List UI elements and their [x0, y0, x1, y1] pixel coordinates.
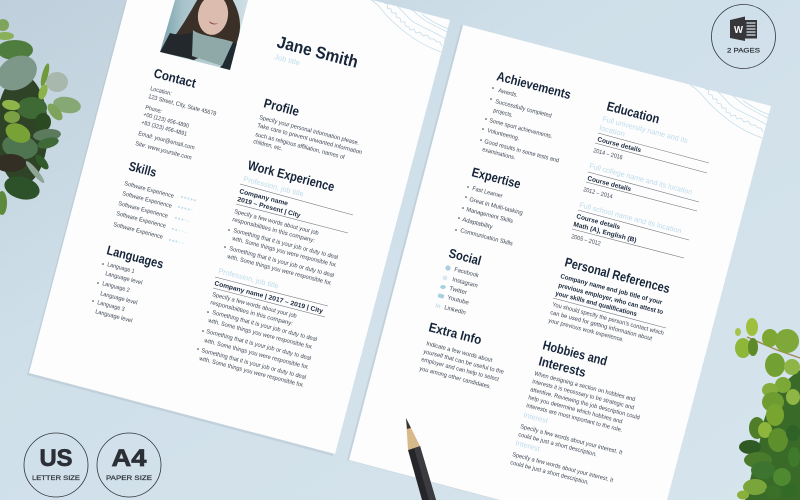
expertise section: Adaptability [461, 217, 493, 231]
contact section: +00 (123) 456-4890 [142, 112, 190, 130]
extra info section: Extra Info [427, 319, 483, 348]
education section: location [598, 123, 626, 138]
expertise section: Expertise [470, 164, 522, 192]
hobbies and interests section: Interest [522, 410, 550, 425]
social section: Youtube [446, 295, 470, 307]
education section [570, 98, 709, 258]
extra info section: you among other candidates. [418, 366, 492, 391]
badge: US letter size: LETTER SIZE [32, 475, 81, 482]
expertise section: Great in Multi-tasking [468, 197, 523, 217]
work experience section: Company name [238, 188, 289, 208]
languages section [92, 242, 165, 325]
work experience section: with. Some things you were responsible for. [226, 254, 333, 287]
extra info section [418, 319, 505, 391]
personal references section: previous employer, who can attest to [557, 282, 664, 316]
skills section: Software Experience [112, 222, 164, 241]
social section: Instagram [451, 277, 478, 289]
hobbies and interests section: When designing a section on hobbies and [533, 371, 636, 403]
contact section: Contact [152, 65, 198, 91]
achievements section: projects. [492, 108, 514, 119]
personal references section: You should specify the person's contact which [551, 302, 664, 337]
profile section: Profile [262, 95, 301, 119]
hobbies and interests section: could be just a short description. [509, 460, 590, 486]
name: Jane Smith [275, 32, 360, 72]
right resume page [347, 25, 771, 500]
badge: A4 paper size [97, 433, 161, 497]
work experience section: Specify a few words about your job [233, 209, 320, 237]
plant: bottom right leaves [735, 318, 800, 500]
expertise section [455, 164, 523, 248]
icon: linkedin: in [434, 303, 441, 310]
hobbies and interests section: attentive. Reviewing the job description could [529, 387, 640, 421]
work experience section: Profession, job title [217, 266, 280, 291]
languages section: Language level [94, 309, 133, 325]
profile section: children, etc. [252, 139, 283, 153]
education section: 2005 – 2012 [570, 234, 602, 248]
hobbies and interests section: Specify a few words about your interest. It [511, 452, 614, 484]
work experience section: with. Some things you were responsible for. [198, 356, 305, 389]
contact section: Site: www.yoursite.com [134, 141, 192, 162]
work experience section: responsibilities in this company: [231, 217, 316, 244]
skills section: Software Experience [121, 191, 173, 210]
skills section: Software Experience [115, 211, 167, 230]
contact section: 123 Street, City, State 45678 [147, 94, 217, 118]
skills section: ••••• [179, 192, 198, 205]
work experience section: Specify a few words about your job [211, 292, 298, 320]
hobbies and interests section: Hobbies and [541, 337, 609, 369]
contact section: Location: [149, 86, 173, 98]
name: Job title [273, 52, 301, 67]
achievements section: Good results in some tests and [483, 139, 560, 164]
education section: 2014 – 2016 [592, 148, 624, 162]
work experience section: Work Experience [246, 157, 336, 194]
badge: US letter size [24, 433, 88, 497]
education section: Course details [586, 175, 632, 193]
social section: Twitter [448, 286, 467, 296]
skills section: ••••• [176, 202, 195, 215]
profile section: Take care to prevent unwanted information [256, 123, 363, 156]
contact section [134, 65, 217, 162]
contact section: Email: your@email.com [137, 131, 195, 152]
work experience section [197, 157, 353, 389]
education section: Math (A), English (B) [572, 221, 637, 244]
left resume page [27, 0, 450, 456]
personal references section [547, 254, 672, 344]
personal references section: your skills and qualifications [554, 290, 638, 318]
hobbies and interests section: Interest [514, 438, 542, 453]
achievements section [480, 68, 573, 164]
work experience section: Profession, job title [242, 174, 305, 199]
languages section: Language 2 [101, 281, 131, 294]
personal references section: your previous work experience. [547, 318, 625, 344]
work experience section: with. Some things you were responsible for. [203, 338, 310, 371]
hobbies and interests section: Specify a few words about your interest. It [519, 424, 623, 456]
social section: Facebook [453, 267, 480, 279]
profile section: such as religious affiliation, names of [254, 132, 345, 161]
achievements section: examinations. [481, 147, 516, 162]
icon: instagram [443, 276, 447, 280]
achievements section: Volunteering. [486, 128, 520, 142]
personal references section: Company name and job title of your [559, 273, 663, 307]
badge: A4 paper size: PAPER SIZE [106, 475, 153, 482]
languages section: Language 3 [96, 300, 126, 313]
skills section: Software Experience [123, 181, 175, 200]
education section: Education [605, 98, 661, 127]
social section [434, 245, 483, 316]
achievements section: Successfully completed [494, 99, 552, 120]
education section: Full school name and its location [578, 200, 682, 235]
education section: Course details [575, 213, 621, 231]
skills section: ••••• [173, 213, 192, 226]
expertise section: Management Skills [465, 207, 513, 225]
work experience section: Something that it is your job or duty to deal [211, 310, 318, 343]
corner wave decoration [690, 85, 770, 138]
icon: facebook [445, 265, 451, 271]
education section: Full university name and its [601, 114, 689, 145]
extra info section: Indicate a few words about [425, 341, 493, 364]
icon: youtube [438, 293, 444, 299]
education section: Course details [596, 136, 642, 154]
skills section: ••••• [167, 235, 186, 248]
contact section: Phone: [144, 105, 163, 115]
badge: word document 2 pages [712, 4, 776, 68]
hobbies and interests section [509, 337, 640, 486]
social section: LinkedIn [443, 305, 466, 316]
extra info section: employer and can help to select [420, 357, 500, 383]
profile photo [160, 0, 248, 70]
skills section: Software Experience [117, 201, 169, 220]
languages section: Language 1 [106, 262, 136, 275]
work experience section: with. Some things you were responsible for. [231, 236, 338, 269]
extra info section: yourself that can be useful to the [422, 349, 505, 376]
badge: A4 paper size: A4 [112, 445, 147, 472]
hobbies and interests section: interests are most important to the role. [525, 403, 623, 434]
achievements section: Some sport achievements. [488, 118, 553, 140]
expertise section: Fast Learner [471, 186, 503, 200]
icon: word document: W [734, 25, 744, 36]
profile section: Specify your personal information please. [258, 115, 360, 147]
plant: top left leaves [0, 19, 82, 215]
corner wave decoration [371, 0, 449, 52]
personal references section: can be used for getting information about [549, 310, 653, 342]
education section: 2012 – 2014 [582, 187, 614, 201]
hobbies and interests section: help you determine which hobbies and [527, 395, 623, 425]
icon: twitter [440, 285, 446, 289]
social section: Social [447, 245, 483, 268]
badge: word document 2 pages: 2 PAGES [727, 48, 761, 54]
hobbies and interests section: interests it is necessary to be strategic and [531, 379, 635, 411]
skills section: ••••• [170, 224, 189, 237]
work experience section: Company name | 2017 – 2019 | City [213, 280, 324, 315]
hobbies and interests section: Interests [537, 353, 587, 380]
work experience section: Something that it is your job or duty to deal [228, 246, 335, 279]
personal references section: Personal References [563, 254, 672, 296]
contact section: +83 (323) 456-4891 [140, 120, 188, 138]
work experience section: 2019 – Present | City [236, 196, 302, 219]
pencil [406, 418, 436, 500]
achievements section: Awards. [497, 88, 519, 99]
achievements section: Achievements [495, 68, 573, 102]
languages section: Languages [105, 242, 165, 272]
profile section [252, 95, 363, 161]
hobbies and interests section: could be just a short description. [517, 432, 598, 458]
work experience section: with. Some things you were responsible for. [207, 318, 314, 351]
education section: Full college name and its location [588, 161, 693, 197]
work experience section: Something that it is your job or duty to deal [232, 228, 339, 261]
languages section: Language level [99, 291, 138, 307]
work experience section: Something that it is your job or duty to deal [200, 348, 307, 381]
badge: US letter size: US [40, 445, 72, 472]
expertise section: Communication Skills [459, 228, 513, 248]
skills section [112, 158, 198, 248]
work experience section: Something that it is your job or duty to deal [205, 329, 312, 362]
skills section: Skills [127, 158, 158, 180]
work experience section: responsibilities in this company: [209, 300, 294, 327]
languages section: Language level [104, 271, 143, 287]
